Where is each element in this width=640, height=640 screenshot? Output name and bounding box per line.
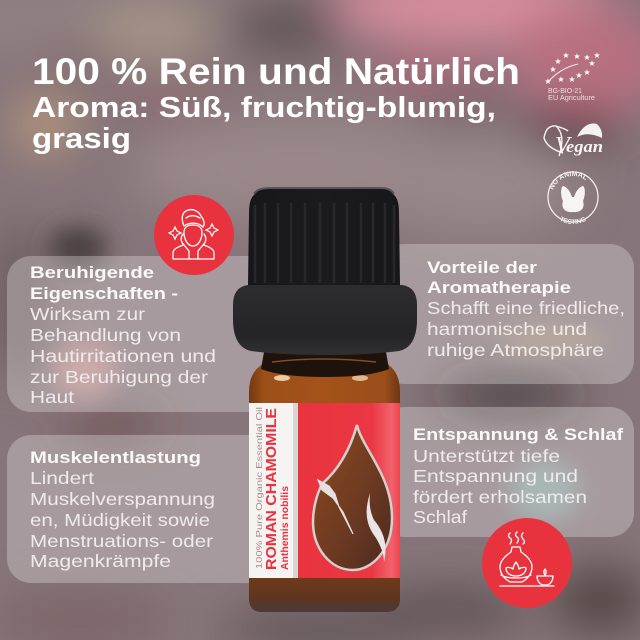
title block: grasig <box>32 123 131 155</box>
panel: Vorteile der Aromatherapie <box>380 244 634 384</box>
badge: BG-BIO-21 EU Agriculture: ★ <box>562 51 570 60</box>
title block: 100 % Rein und Natürlich <box>32 51 520 92</box>
panel: Entspannung und Schlaf <box>380 407 634 537</box>
label text: Anthemis nobilis <box>280 486 291 570</box>
panel: Beruhigende Eigenschaften: zur Beruhigung der <box>30 367 208 387</box>
panel: Muskelentlastung: en, Müdigkeit sowie <box>30 510 210 530</box>
panel: Entspannung und Schlaf: Entspannung & Schlaf <box>413 425 623 444</box>
panel: Beruhigende Eigenschaften: Eigenschaften - <box>30 284 178 303</box>
label <box>249 403 400 578</box>
label text: 100% Pure Organic Essential Oil <box>254 407 264 569</box>
badge: BG-BIO-21 EU Agriculture: ★ <box>588 59 596 68</box>
badge: BG-BIO-21 EU Agriculture: EU Agriculture <box>548 93 595 102</box>
panel: Entspannung und Schlaf: Schlaf <box>413 507 467 527</box>
badge: Vegan: egan <box>566 137 603 156</box>
panel: Muskelentlastung: Menstruations- oder <box>30 531 213 551</box>
badge: BG-BIO-21 EU Agriculture: ★ <box>583 68 591 77</box>
panel: Beruhigende Eigenschaften: Haut <box>30 387 74 407</box>
badge: Vegan: V <box>555 133 572 159</box>
panel: Vorteile der Aromatherapie: ruhige Atmosphäre <box>427 340 604 360</box>
title block <box>32 51 520 155</box>
panel: Muskelentlastung: Lindert <box>30 468 94 488</box>
label text: ROMAN CHAMOMILE <box>263 408 280 570</box>
panel: Beruhigende Eigenschaften: Hautirritationen und <box>30 346 216 366</box>
panel: Beruhigende Eigenschaften: Beruhigende <box>30 263 154 282</box>
badge: no animal testing: TESTING <box>560 216 586 224</box>
label text <box>254 407 291 570</box>
panel: Beruhigende Eigenschaften <box>7 256 277 412</box>
badge: BG-BIO-21 EU Agriculture: ★ <box>568 75 576 84</box>
badge: BG-BIO-21 EU Agriculture: ★ <box>557 75 565 84</box>
panel: Muskelentlastung: Muskelverspannung <box>30 489 215 509</box>
bottle neck <box>261 352 389 377</box>
panel: Muskelentlastung: Muskelentlastung <box>30 448 201 467</box>
icon: woman with towel <box>154 195 234 275</box>
product bottle <box>233 188 417 612</box>
panel: Vorteile der Aromatherapie: Vorteile der <box>427 258 537 277</box>
badge: no animal testing <box>547 171 599 224</box>
bottle body <box>249 364 400 612</box>
panel: Vorteile der Aromatherapie: Schafft eine friedliche, <box>427 298 625 318</box>
panel: Entspannung und Schlaf: Entspannung und <box>413 466 578 486</box>
badge: BG-BIO-21 EU Agriculture: ★ <box>583 53 591 62</box>
badge: BG-BIO-21 EU Agriculture: ★ <box>554 57 562 66</box>
drop emblem <box>313 425 392 570</box>
panel: Beruhigende Eigenschaften: Behandlung von <box>30 325 181 345</box>
cap <box>248 188 400 285</box>
icon: aroma diffuser <box>482 518 572 608</box>
title block: Aroma: Süß, fruchtig-blumig, <box>32 92 496 124</box>
panel: Entspannung und Schlaf: Unterstützt tiefe <box>413 446 560 466</box>
badge: BG-BIO-21 EU Agriculture: ★ <box>575 71 583 80</box>
panel: Muskelentlastung: Magenkrämpfe <box>30 551 171 571</box>
badge: BG-BIO-21 EU Agriculture: ★ <box>573 52 581 61</box>
collar <box>233 285 417 355</box>
badge: BG-BIO-21 EU Agriculture: BG-BIO-21 <box>548 86 582 95</box>
panel: Muskelentlastung <box>7 435 277 583</box>
badge: Vegan <box>544 124 603 159</box>
panel: Entspannung und Schlaf: fördert erholsamen <box>413 487 587 507</box>
badge: BG-BIO-21 EU Agriculture <box>544 51 601 102</box>
panel: Vorteile der Aromatherapie: harmonische und <box>427 319 587 339</box>
badge: BG-BIO-21 EU Agriculture: ★ <box>593 51 601 60</box>
panel: Vorteile der Aromatherapie: Aromatherapie <box>427 278 571 297</box>
panel: Beruhigende Eigenschaften: Wirksam zur <box>30 304 145 324</box>
badge: no animal testing: NO ANIMAL <box>548 171 586 190</box>
badge: BG-BIO-21 EU Agriculture: ★ <box>544 77 552 86</box>
badge: BG-BIO-21 EU Agriculture: ★ <box>549 65 557 74</box>
